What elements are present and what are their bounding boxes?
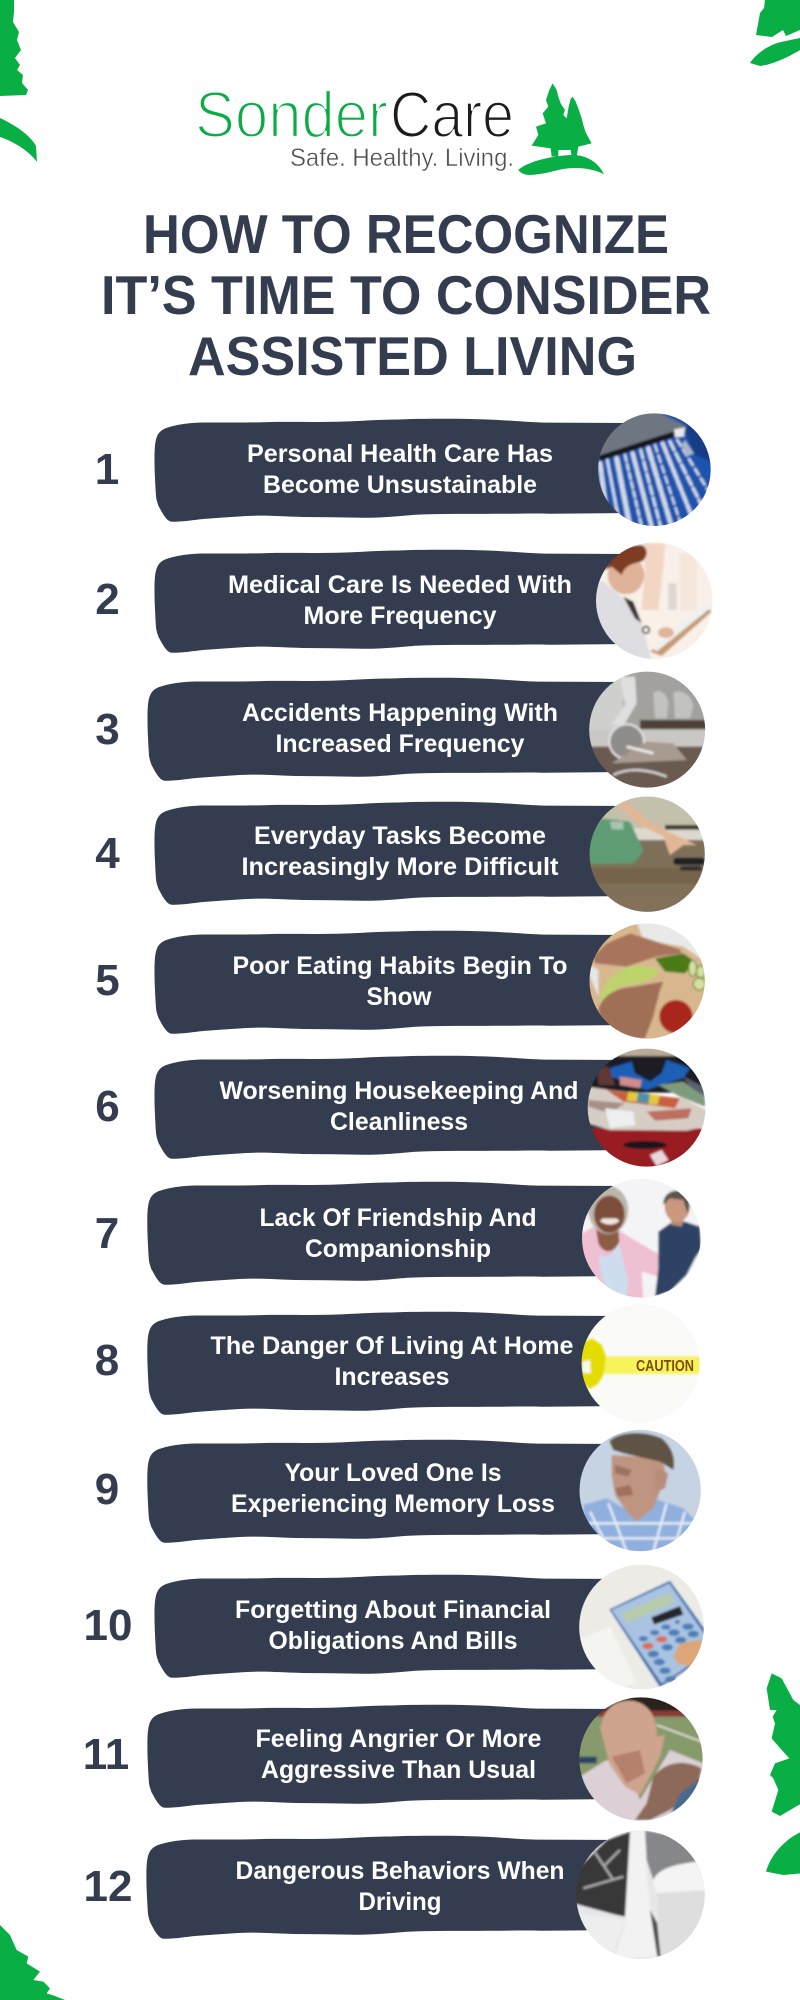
title: HOW TO RECOGNIZE (143, 203, 669, 265)
title: IT’S TIME TO CONSIDER (101, 264, 711, 326)
photo: messy open suitcase (585, 1047, 708, 1170)
banner text 2: Medical Care Is Needed With (228, 571, 572, 599)
banner 3 (148, 678, 628, 781)
icon: logo trees on a hill (518, 83, 604, 175)
banner text 1: Become Unsustainable (263, 471, 537, 499)
banner text 11: Aggressive Than Usual (261, 1756, 536, 1784)
number 3: 3 (95, 705, 120, 754)
banner text 3: Accidents Happening With (242, 699, 558, 727)
number 10: 10 (84, 1601, 132, 1650)
banner 11 (147, 1705, 627, 1808)
banner 6 (154, 1056, 634, 1159)
number 8: 8 (95, 1336, 119, 1385)
logo wordmark: Sonder (195, 78, 388, 151)
number 9: 9 (95, 1465, 119, 1514)
banner text 10: Obligations And Bills (268, 1627, 518, 1655)
item 7 (95, 1177, 703, 1300)
photo: crashed white car (573, 1828, 708, 1962)
banner text 1 (247, 440, 553, 499)
title: ASSISTED LIVING (188, 325, 637, 387)
banner text 3: Increased Frequency (276, 730, 525, 758)
banner text 6 (220, 1077, 578, 1136)
item 5 (95, 922, 708, 1042)
banner text 9 (231, 1459, 555, 1518)
photo: shower head (597, 410, 713, 528)
item 6 (95, 1047, 708, 1170)
banner 10 (154, 1575, 634, 1678)
banner text 5: Show (366, 983, 432, 1011)
banner text 2 (228, 571, 572, 630)
photo: older man in a flat cap (577, 1427, 705, 1555)
banner 5 (154, 931, 634, 1034)
banner text 8: The Danger Of Living At Home (210, 1332, 574, 1360)
banner text 7 (260, 1204, 536, 1263)
banner text 5: Poor Eating Habits Begin To (232, 952, 568, 980)
photo: older man in pain on a tennis court (577, 1695, 705, 1823)
photo: hands preparing vegetables (587, 922, 708, 1042)
banner text 5 (232, 952, 568, 1011)
number 4: 4 (95, 829, 120, 878)
number 7: 7 (95, 1209, 119, 1258)
banner text 6: Worsening Housekeeping And (220, 1077, 578, 1105)
banner text 12 (236, 1857, 564, 1916)
banner 12 (146, 1836, 626, 1939)
banner text 1: Personal Health Care Has (247, 440, 553, 468)
item 3 (95, 670, 708, 790)
banner text 11 (256, 1725, 542, 1784)
banner 7 (147, 1182, 627, 1285)
caution label: CAUTION (636, 1358, 694, 1375)
number 2: 2 (95, 575, 120, 624)
logo: SonderCare (195, 78, 604, 175)
banner text 6: Cleanliness (330, 1108, 468, 1136)
banner 1 (154, 419, 634, 522)
item 4 (95, 795, 708, 915)
banner text 2: More Frequency (304, 602, 497, 630)
decorative tree: top left corner (0, 0, 37, 162)
photo: two smiling older women (580, 1177, 703, 1300)
photo: doctor reading a clipboard (593, 540, 717, 662)
banner text 9: Your Loved One Is (284, 1459, 502, 1487)
banner text 11: Feeling Angrier Or More (256, 1725, 542, 1753)
banner text 4: Increasingly More Difficult (242, 853, 559, 881)
item 1 (95, 410, 713, 528)
item 10 (84, 1562, 707, 1692)
number 12: 12 (84, 1862, 132, 1911)
number 1: 1 (95, 445, 119, 494)
banner 8 (147, 1312, 627, 1415)
photo: calculator on paperwork (577, 1562, 707, 1692)
decorative tree: top right corner (750, 0, 800, 66)
banner text 7: Companionship (305, 1235, 491, 1263)
number 6: 6 (95, 1082, 120, 1131)
banner text 8 (210, 1332, 574, 1391)
decorative tree: bottom left corner (0, 1925, 67, 2000)
logo wordmark (195, 78, 514, 151)
photo: yellow caution tape (582, 1316, 700, 1406)
banner text 3 (242, 699, 558, 758)
banner text 7: Lack Of Friendship And (260, 1204, 536, 1232)
banner text 9: Experiencing Memory Loss (231, 1490, 555, 1518)
logo tagline: Safe. Healthy. Living. (290, 144, 514, 172)
banner text 10: Forgetting About Financial (235, 1596, 551, 1624)
banner text 4: Everyday Tasks Become (254, 822, 546, 850)
item 9 (95, 1427, 705, 1555)
banner 4 (154, 802, 634, 905)
number 5: 5 (95, 956, 120, 1005)
banner 9 (147, 1440, 627, 1543)
title (101, 203, 711, 387)
item 8 (96, 1312, 700, 1415)
number 11: 11 (83, 1730, 129, 1779)
banner text 12: Driving (358, 1888, 442, 1916)
decorative tree: right edge (766, 1673, 800, 1875)
item 11 (83, 1695, 705, 1823)
banner text 10 (235, 1596, 551, 1655)
photo: dropped keys and a green bag (587, 795, 708, 915)
banner text 4 (242, 822, 559, 881)
photo: broken glass on a counter (587, 670, 708, 790)
item 2 (95, 540, 717, 662)
banner 2 (154, 550, 634, 653)
banner text 8: Increases (334, 1363, 450, 1391)
item 12 (84, 1828, 708, 1962)
banner text 12: Dangerous Behaviors When (236, 1857, 564, 1885)
logo wordmark: Care (390, 78, 514, 151)
